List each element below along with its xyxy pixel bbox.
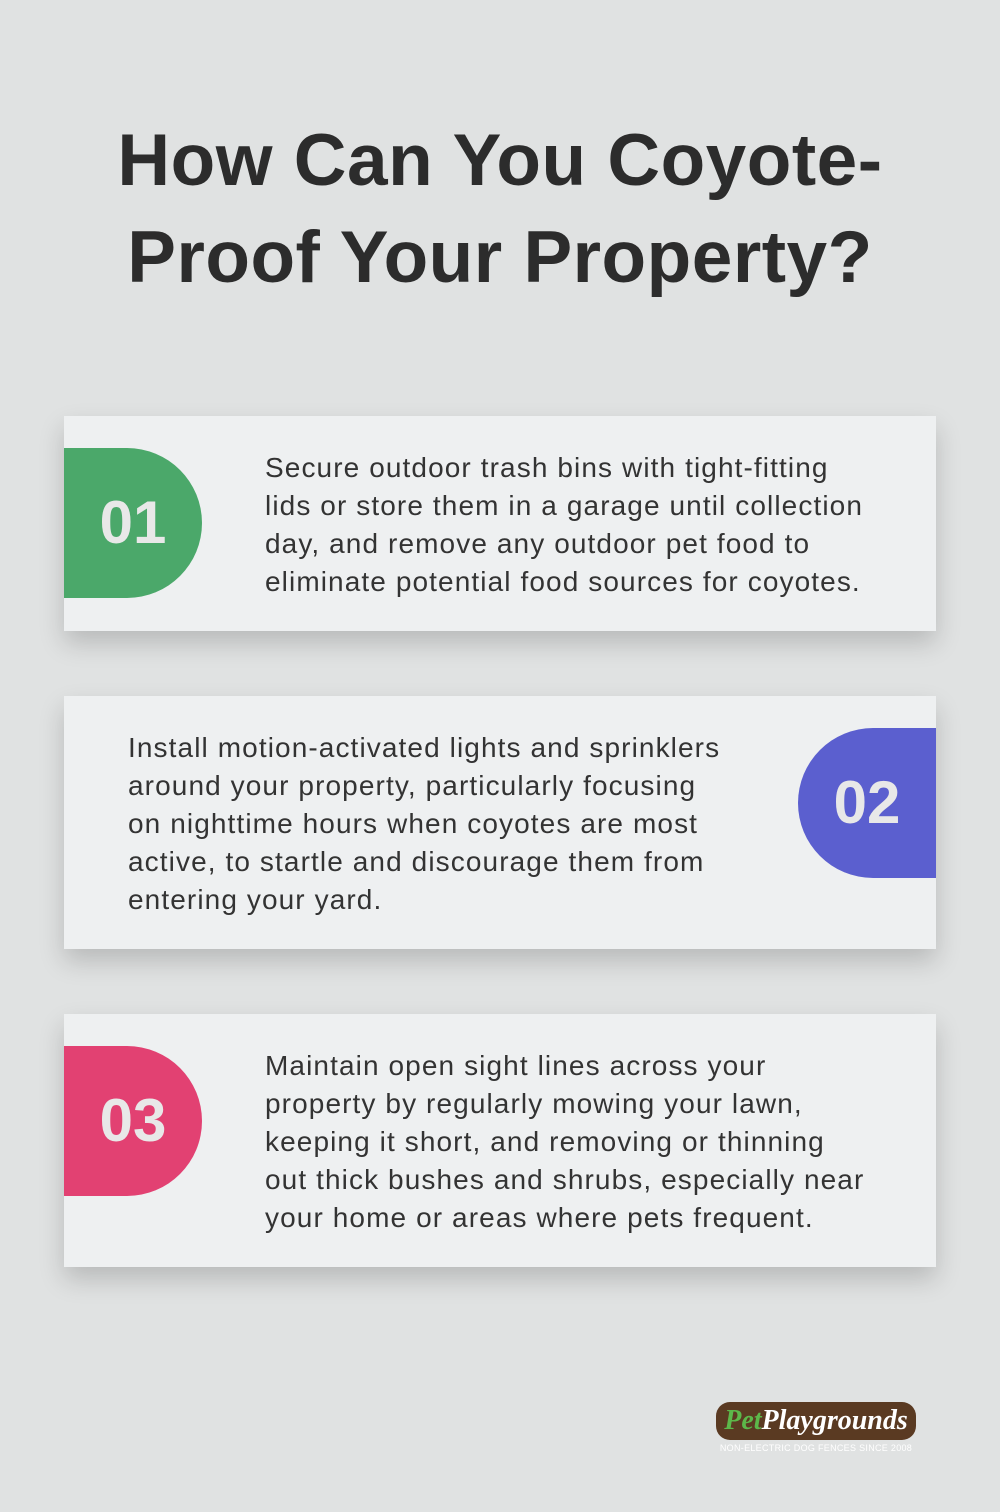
logo: PetPlaygrounds — [724, 1405, 908, 1436]
title — [117, 120, 883, 298]
text: step 1: Secure outdoor trash bins with tight-fitting — [265, 452, 829, 483]
text: step 2: around your property, particularly focusing — [128, 770, 696, 801]
text: step 2: on nighttime hours when coyotes are most — [128, 808, 698, 839]
badge: 01 — [64, 448, 202, 598]
badge: 03: 03 — [100, 1087, 166, 1154]
text: step 1: lids or store them in a garage until collection — [265, 490, 863, 521]
badge: 01: 01 — [100, 489, 166, 556]
text: step 3 — [265, 1050, 864, 1233]
text: step 3: keeping it short, and removing or thinning — [265, 1126, 825, 1157]
text: step 3: property by regularly mowing your lawn, — [265, 1088, 803, 1119]
text: step 2: entering your yard. — [128, 884, 382, 915]
badge: 02 — [798, 728, 936, 878]
text: step 2: active, to startle and discourage them from — [128, 846, 704, 877]
title: How Can You Coyote- — [117, 120, 883, 201]
panel: step 1 — [64, 416, 936, 631]
text: step 1 — [265, 452, 863, 597]
text: step 1: day, and remove any outdoor pet food to — [265, 528, 810, 559]
text: step 2 — [128, 732, 720, 915]
logo — [716, 1402, 916, 1453]
text: step 3: Maintain open sight lines across your — [265, 1050, 766, 1081]
title: Proof Your Property? — [127, 217, 873, 298]
panel: step 3 — [64, 1014, 936, 1267]
badge: 02: 02 — [834, 769, 900, 836]
text: step 3: out thick bushes and shrubs, especially near — [265, 1164, 864, 1195]
text: step 2: Install motion-activated lights and sprinklers — [128, 732, 720, 763]
text: step 1: eliminate potential food sources for coyotes. — [265, 566, 861, 597]
text: step 3: your home or areas where pets frequent. — [265, 1202, 814, 1233]
panel: step 2 — [64, 696, 936, 949]
logo: NON-ELECTRIC DOG FENCES SINCE 2008 — [720, 1443, 912, 1453]
badge: 03 — [64, 1046, 202, 1196]
